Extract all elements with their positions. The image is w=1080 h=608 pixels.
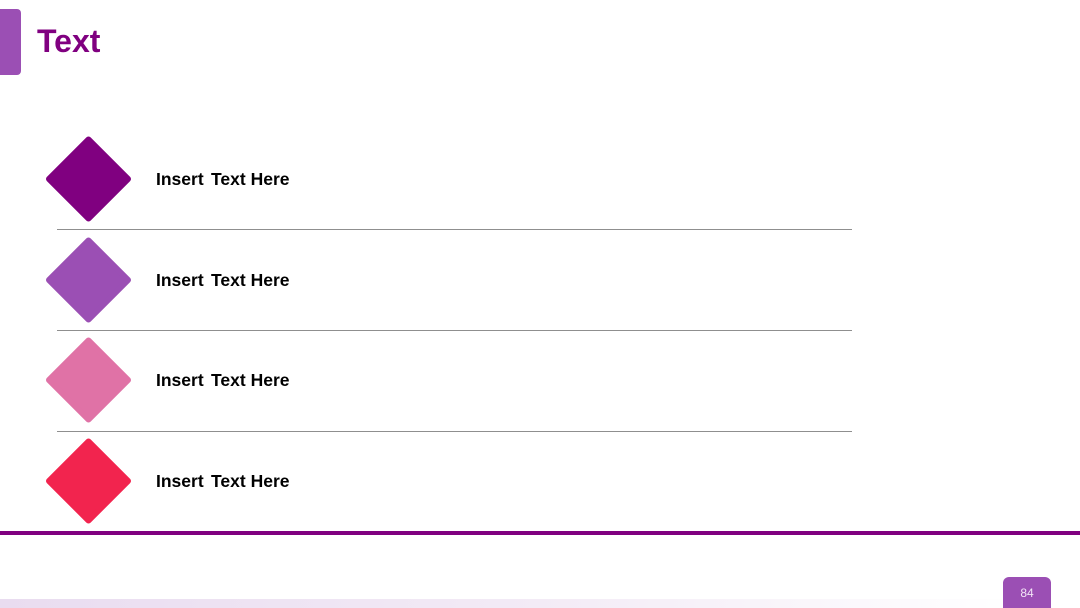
title: Text: [37, 23, 100, 59]
page number badge: [1003, 577, 1051, 608]
header accent tab: [0, 9, 21, 75]
item text 4: Insert Text Here: [156, 471, 290, 491]
item text 3: Insert Text Here: [156, 370, 290, 390]
item text 1: Insert Text Here: [156, 169, 290, 189]
footer gradient band: [0, 599, 1080, 608]
footer rule: [0, 530, 1080, 534]
divider 3: [57, 431, 852, 432]
divider 1: [57, 229, 852, 230]
page number badge: 84: [1020, 586, 1034, 600]
divider 2: [57, 330, 852, 331]
item text 2: Insert Text Here: [156, 270, 290, 290]
